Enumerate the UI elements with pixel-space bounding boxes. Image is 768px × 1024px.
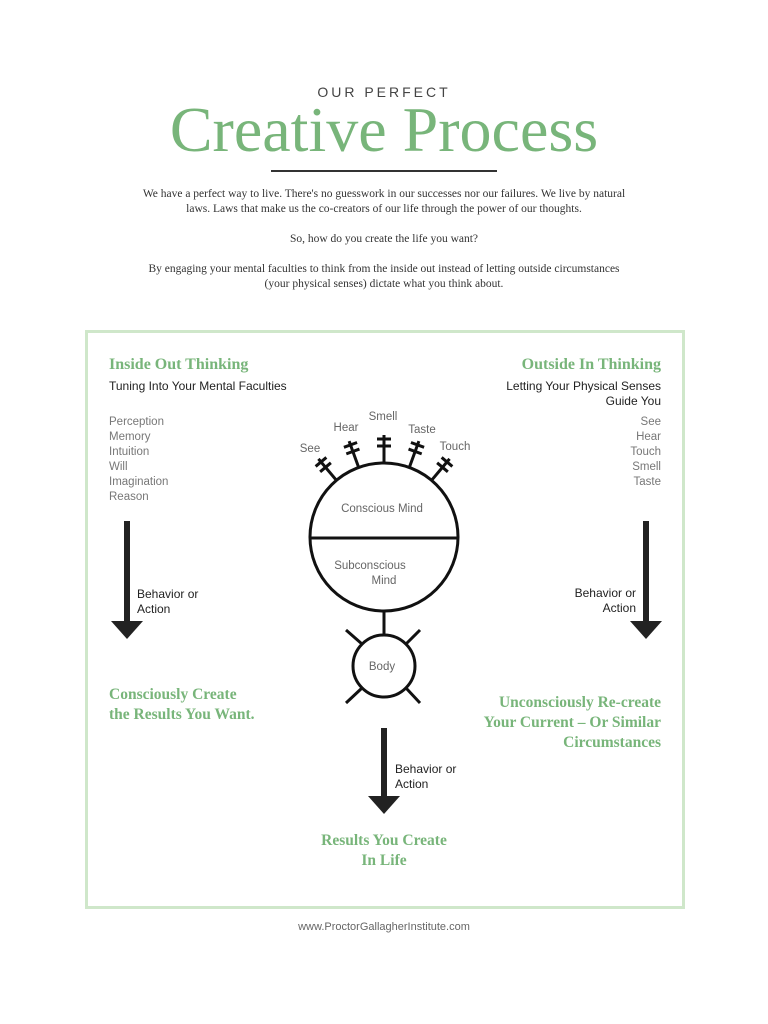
underline — [271, 170, 497, 172]
diagram: mind and body: Smell — [369, 411, 397, 423]
diagram: mind and body: Mind — [372, 575, 396, 587]
label: behavior bottom: Behavior or — [395, 762, 456, 776]
final result: In Life — [361, 852, 407, 869]
label: behavior bottom: Action — [395, 777, 428, 791]
list: senses: Hear — [636, 431, 661, 443]
diagram: mind and body: Hear — [334, 422, 359, 434]
list: faculties: Reason — [109, 491, 149, 503]
footer url: www.ProctorGallagherInstitute.com — [298, 921, 470, 933]
list: senses: Smell — [632, 461, 661, 473]
result left — [109, 686, 255, 723]
arrow bottom — [368, 728, 400, 814]
intro text: By engaging your mental faculties to think from the inside out instead of letting outside circumstances — [148, 263, 620, 275]
final result: Results You Create — [321, 832, 447, 849]
subheading right — [506, 379, 661, 408]
list: senses: See — [641, 416, 661, 428]
intro text — [142, 188, 625, 290]
label: behavior right: Behavior or — [575, 586, 636, 600]
heading: outside in: Outside In Thinking — [522, 356, 661, 373]
list: faculties: Memory — [109, 431, 151, 443]
list: faculties: Intuition — [109, 446, 149, 458]
list: senses: Touch — [630, 446, 661, 458]
subtitle: OUR PERFECT — [317, 84, 451, 100]
result right — [484, 694, 661, 751]
result right: Your Current – Or Similar — [484, 714, 661, 731]
arrow right — [630, 521, 662, 639]
result left: Consciously Create — [109, 686, 237, 703]
diagram: mind and body: See — [300, 443, 320, 455]
title: Creative Process — [170, 94, 598, 165]
diagram: mind and body: Taste — [408, 424, 436, 436]
panel: diagram — [85, 330, 685, 909]
diagram: mind and body: Touch — [440, 441, 470, 453]
arrow left — [111, 521, 143, 639]
subheading left: Tuning Into Your Mental Faculties — [109, 379, 287, 393]
subheading right: Letting Your Physical Senses — [506, 379, 661, 393]
list: faculties: Imagination — [109, 476, 168, 488]
label: behavior left — [137, 587, 198, 616]
diagram: mind and body: Conscious Mind — [341, 503, 423, 515]
diagram: mind and body: Subconscious — [334, 560, 406, 572]
list: senses — [630, 416, 661, 488]
heading: inside out: Inside Out Thinking — [109, 356, 248, 373]
result right: Circumstances — [563, 734, 661, 751]
label: behavior right: Action — [603, 601, 636, 615]
result left: the Results You Want. — [109, 706, 255, 723]
subheading right: Guide You — [606, 394, 661, 408]
result right: Unconsciously Re-create — [499, 694, 661, 711]
list: faculties: Perception — [109, 416, 164, 428]
label: behavior right — [575, 586, 636, 615]
diagram: mind and body: Body — [369, 661, 395, 673]
final result — [321, 832, 447, 869]
intro text: So, how do you create the life you want? — [290, 233, 478, 245]
label: behavior left: Behavior or — [137, 587, 198, 601]
list: senses: Taste — [634, 476, 661, 488]
intro text: laws. Laws that make us the co-creators of our life through the power of our thoughts. — [186, 203, 582, 215]
label: behavior left: Action — [137, 602, 170, 616]
intro text: We have a perfect way to live. There's no guesswork in our successes nor our failures. We live by natural — [143, 188, 625, 200]
list: faculties: Will — [109, 461, 128, 473]
label: behavior bottom — [395, 762, 456, 791]
list: faculties — [109, 416, 168, 503]
intro text: (your physical senses) dictate what you think about. — [265, 278, 503, 290]
